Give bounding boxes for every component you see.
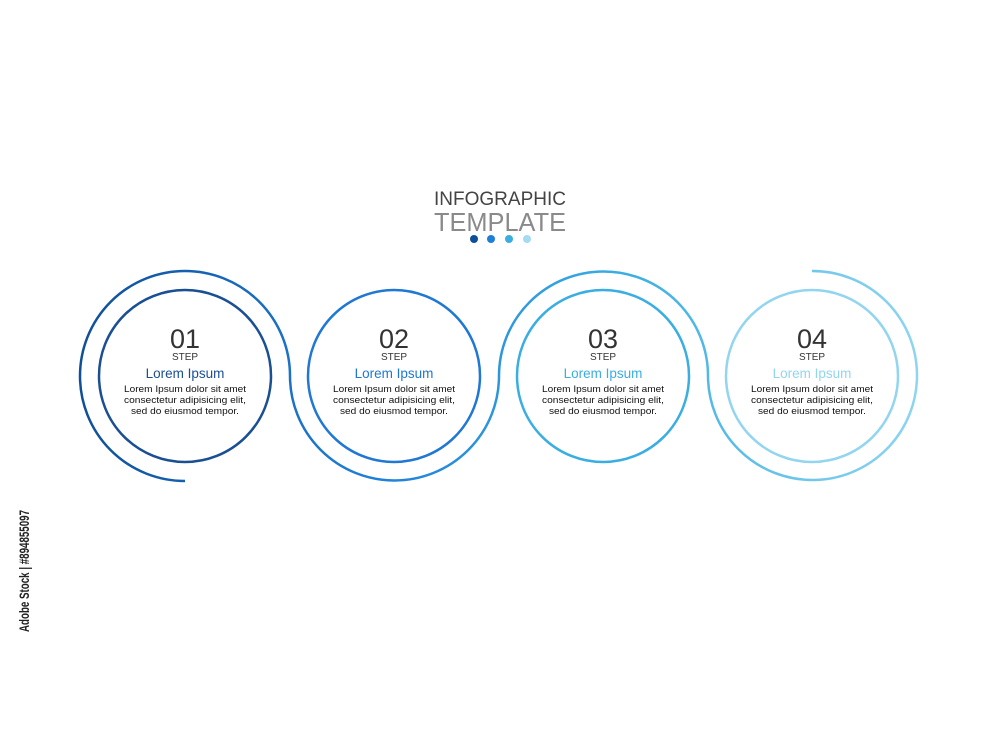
step 4: 04	[797, 324, 827, 354]
step 1: 01	[170, 324, 200, 354]
step 1: sed do eiusmod tempor.	[131, 406, 239, 417]
spiral connector line	[80, 271, 917, 481]
title	[434, 189, 566, 237]
step 3: sed do eiusmod tempor.	[549, 406, 657, 417]
step 4: STEP	[799, 352, 825, 363]
step 2: Lorem Ipsum	[355, 366, 433, 381]
step 4: Lorem Ipsum dolor sit amet	[751, 384, 873, 395]
step 2: consectetur adipisicing elit,	[333, 395, 455, 406]
step 4: consectetur adipisicing elit,	[751, 395, 873, 406]
step 1	[99, 290, 271, 462]
step 3: STEP	[590, 352, 616, 363]
title dots	[470, 235, 531, 243]
title: INFOGRAPHIC	[434, 189, 566, 210]
step 1: consectetur adipisicing elit,	[124, 395, 246, 406]
step 4: sed do eiusmod tempor.	[758, 406, 866, 417]
side caption: Adobe Stock | #894855097	[16, 510, 32, 632]
step 2: 02	[379, 324, 409, 354]
step 1: Lorem Ipsum	[146, 366, 224, 381]
step 1: STEP	[172, 352, 198, 363]
step 3	[517, 290, 689, 462]
step 1: Lorem Ipsum dolor sit amet	[124, 384, 246, 395]
step 2: sed do eiusmod tempor.	[340, 406, 448, 417]
step 3: consectetur adipisicing elit,	[542, 395, 664, 406]
step 2: Lorem Ipsum dolor sit amet	[333, 384, 455, 395]
step 3: 03	[588, 324, 618, 354]
step 4	[726, 290, 898, 462]
step 3: Lorem Ipsum	[564, 366, 642, 381]
step 2	[308, 290, 480, 462]
step 2: STEP	[381, 352, 407, 363]
title: TEMPLATE	[434, 207, 566, 237]
step 3: Lorem Ipsum dolor sit amet	[542, 384, 664, 395]
step 4: Lorem Ipsum	[773, 366, 851, 381]
